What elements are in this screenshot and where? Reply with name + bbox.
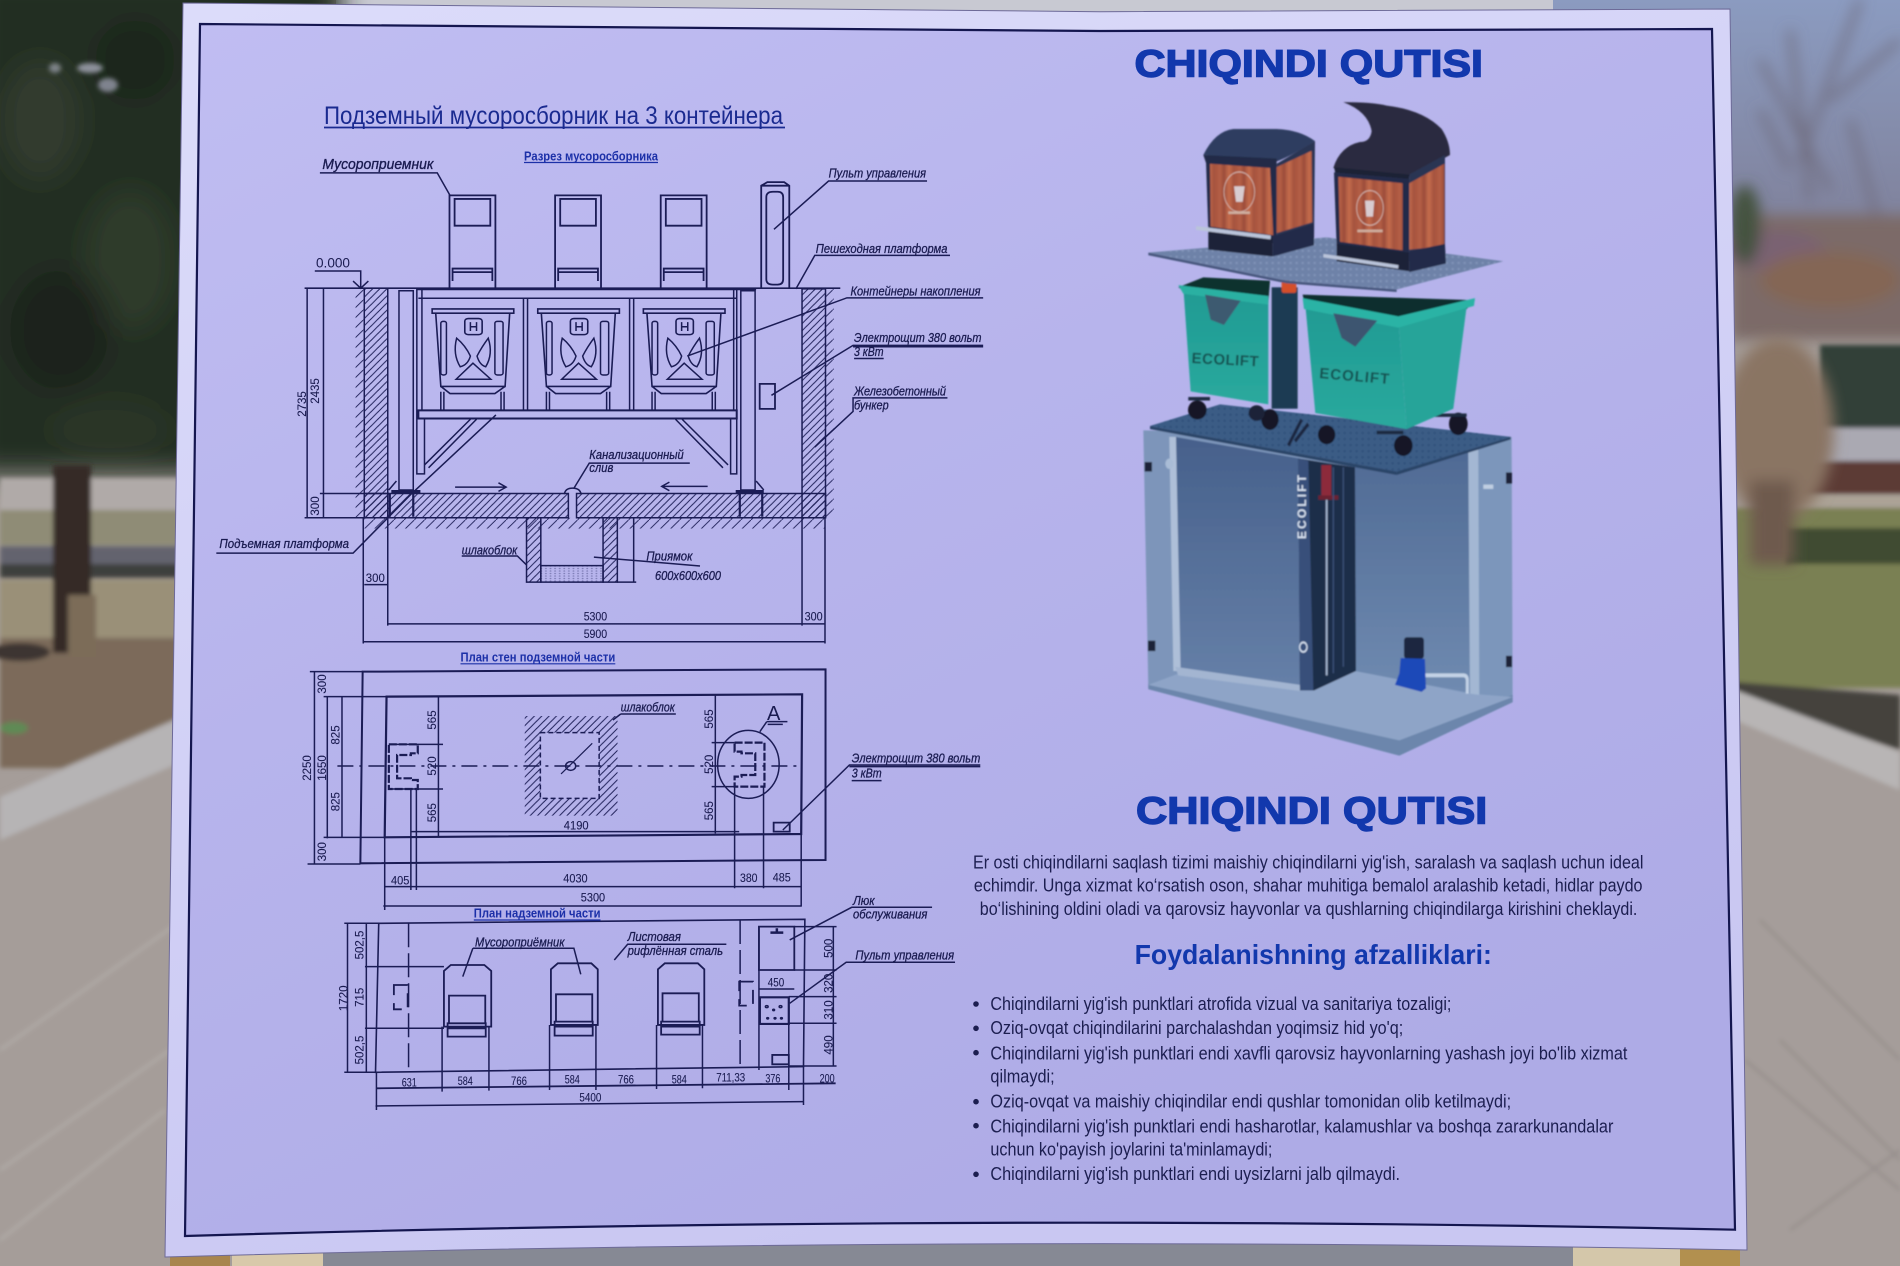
underground plan labels: 2250 xyxy=(302,755,314,781)
cross-section labels and dimensions: 300 xyxy=(805,611,823,623)
teal containers xyxy=(1178,277,1270,302)
cross-section labels and dimensions: 300 xyxy=(310,496,322,516)
plan of above-ground part: labels: обслуживания xyxy=(853,906,927,921)
benefits list: uchun ko'payish joylarini ta'minlamaydi; xyxy=(990,1140,1272,1160)
flow arrows and drain xyxy=(455,482,708,491)
dimension lines xyxy=(305,288,825,644)
cross-section labels and dimensions: 3 кВт xyxy=(854,344,884,359)
cross-section labels and dimensions: Контейнеры накопления xyxy=(850,283,981,298)
plan of above-ground part: labels: 200 xyxy=(820,1074,835,1086)
underground plan labels: 565 xyxy=(704,709,716,729)
cross-section labels and dimensions: 5300 xyxy=(584,611,607,623)
underground plan labels: 485 xyxy=(773,873,791,885)
benefits heading: Foydalanishning afzalliklari: xyxy=(1135,939,1492,970)
product lettering xyxy=(1191,350,1390,539)
right kiosk xyxy=(1333,102,1450,177)
plan of above-ground part: labels: 376 xyxy=(765,1074,780,1086)
underground plan labels: 405 xyxy=(391,875,409,887)
underground plan labels: 4190 xyxy=(564,820,589,832)
underground plan labels: 300 xyxy=(317,842,329,861)
wheels xyxy=(1188,400,1207,420)
plan of above-ground part: labels: 5400 xyxy=(579,1093,601,1105)
above-ground plan xyxy=(376,919,805,1072)
underground plan labels: 825 xyxy=(331,725,343,745)
lower deck xyxy=(1150,404,1511,472)
underground plan labels xyxy=(302,650,980,905)
cross-section labels and dimensions: Пешеходная платформа xyxy=(816,241,947,256)
left kiosk xyxy=(1203,129,1315,162)
plan of above-ground part: labels: 584 xyxy=(458,1076,473,1088)
plan of above-ground part: labels: 490 xyxy=(823,1035,835,1055)
plan of above-ground part: labels: 584 xyxy=(565,1075,580,1087)
cross-section labels and dimensions: Разрез мусоросборника xyxy=(524,148,659,163)
plan of above-ground part: labels: 766 xyxy=(511,1076,527,1088)
benefits list: Oziq-ovqat va maishiy chiqindilar endi qushlar tomonidan olib ketilmaydi; xyxy=(990,1091,1511,1111)
plan of above-ground part: labels: 500 xyxy=(823,939,835,958)
cross-section geometry xyxy=(216,173,983,644)
plan of above-ground part: labels: 711,33 xyxy=(716,1073,745,1085)
inner frame xyxy=(185,24,1735,1236)
underground plan labels: Электрощит 380 вольт xyxy=(852,750,980,765)
cross-section labels and dimensions: Электрощит 380 вольт xyxy=(854,330,982,345)
container 2 xyxy=(538,309,619,410)
control console xyxy=(761,182,789,289)
underground plan labels: План стен подземной части xyxy=(460,650,615,665)
illustration: underground bin unit xyxy=(1143,102,1513,756)
cross-section labels and dimensions: шлакоблок xyxy=(462,542,518,557)
cross-section labels and dimensions: 2435 xyxy=(310,378,322,404)
upper bins xyxy=(449,195,495,288)
benefits list: Chiqindilarni yig'ish punktlari atrofida vizual va sanitariya tozaligi; xyxy=(990,994,1451,1014)
top plate xyxy=(1148,237,1503,289)
underground plan labels: 1650 xyxy=(317,755,329,781)
intro paragraph: bo‘lishining oldini oladi va qarovsiz hayvonlar va qushlarning chiqindilarga kirishini cheklaydi. xyxy=(980,899,1637,919)
cross-section labels and dimensions: Мусороприемник xyxy=(322,156,434,173)
leader lines xyxy=(320,173,983,356)
benefits list: Chiqindilarni yig'ish punktlari endi hasharotlar, kalamushlar va boshqa zararkunandalar xyxy=(990,1117,1613,1137)
plan of above-ground part: labels: Люк xyxy=(852,893,875,908)
container 1 xyxy=(432,309,514,410)
cross-section labels and dimensions: 300 xyxy=(366,573,385,585)
heading: second: CHIQINDI QUTISI xyxy=(1136,790,1487,832)
underground plan labels: 3 кВт xyxy=(852,765,882,780)
plan of above-ground part: labels: 715 xyxy=(355,988,367,1007)
plan of above-ground part: labels: 502,5 xyxy=(355,1036,367,1064)
plan of above-ground part: labels: 502,5 xyxy=(355,931,367,959)
benefits list: Chiqindilarni yig'ish punktlari endi uysizlarni jalb qilmaydi. xyxy=(990,1164,1400,1184)
cross-section labels and dimensions: Подъемная платформа xyxy=(219,536,349,551)
cross-section labels and dimensions: Приямок xyxy=(646,549,693,564)
plan of above-ground part: labels: 450 xyxy=(768,978,784,990)
lift column xyxy=(1298,459,1356,691)
concrete pit xyxy=(1143,102,1513,756)
cross-section labels and dimensions: Канализационный xyxy=(589,447,684,462)
plan of above-ground part: labels: 320 xyxy=(823,974,835,993)
intro paragraph: Er osti chiqindilarni saqlash tizimi maishiy chiqindilarni yig'ish, saralash va saqlash uchun ideal xyxy=(973,852,1643,872)
underground plan labels: 5300 xyxy=(581,893,605,905)
underground plan labels: 380 xyxy=(740,873,758,885)
plan of above-ground part: labels: План надземной части xyxy=(474,906,600,921)
plan of above-ground part: labels: 766 xyxy=(618,1075,634,1087)
underground plan labels: 520 xyxy=(704,755,716,774)
cross-section labels and dimensions: 2735 xyxy=(297,391,309,417)
intro paragraph: echimdir. Unga xizmat ko‘rsatish oson, shahar muhitiga bemalol aralashib ketadi, hidlar paydo xyxy=(974,876,1642,896)
plan of above-ground part: labels: 1720 xyxy=(338,986,350,1011)
underground plan labels: 300 xyxy=(317,674,329,694)
product lettering: ECOLIFT xyxy=(1319,365,1390,388)
plan of above-ground part: labels xyxy=(338,893,954,1105)
underground plan labels: 4030 xyxy=(563,874,588,886)
underground plan labels: 565 xyxy=(704,801,716,820)
underground plan labels: 825 xyxy=(331,792,343,811)
centre column and valve xyxy=(1272,287,1298,409)
underground plan labels: 520 xyxy=(427,756,439,776)
cross-section labels and dimensions: бункер xyxy=(854,398,889,413)
plan of above-ground part: labels: 310 xyxy=(823,1000,835,1020)
section drawing: cross-section of the collector xyxy=(216,148,983,644)
cross-section labels and dimensions: Пульт управления xyxy=(829,166,926,180)
plan of above-ground part: labels: Мусороприёмник xyxy=(475,935,565,950)
underground plan labels: 565 xyxy=(427,803,439,822)
product lettering: ECOLIFT xyxy=(1191,350,1259,371)
cross-section labels and dimensions: слив xyxy=(589,460,613,475)
product lettering: ECOLIFT xyxy=(1295,474,1309,539)
benefits list: Oziq-ovqat chiqindilarini parchalashdan yoqimsiz hid yo'q; xyxy=(990,1018,1403,1038)
benefits list: Chiqindilarni yig'ish punktlari endi xavfli qarovsiz hayvonlarning yashash joyi bo'lib xizmat xyxy=(990,1043,1627,1063)
underground plan labels: А xyxy=(767,703,781,725)
cross-section labels and dimensions: 0.000 xyxy=(316,254,350,270)
heading: top: CHIQINDI QUTISI xyxy=(1134,44,1483,86)
underground plan geometry xyxy=(308,669,980,1110)
sump pump xyxy=(1425,675,1467,694)
underground plan labels: 565 xyxy=(427,710,439,730)
benefits list xyxy=(973,994,1627,1184)
plan of above-ground part: labels: 584 xyxy=(672,1074,687,1086)
plan of underground walls xyxy=(302,650,980,1110)
cross-section labels and dimensions: Железобетонный xyxy=(853,383,946,398)
plan of above-ground part: labels: 631 xyxy=(402,1078,417,1090)
container 3 xyxy=(643,309,725,410)
cross-section labels and dimensions: 600х600х600 xyxy=(655,568,722,583)
plan of above-ground part: labels: Пульт управления xyxy=(855,947,954,962)
cross-section labels and dimensions xyxy=(219,148,982,641)
intro paragraph xyxy=(973,852,1643,919)
plan of above-ground part: labels: Листовая xyxy=(627,929,681,944)
benefits list: qilmaydi; xyxy=(990,1067,1055,1087)
cross-section labels and dimensions: 5900 xyxy=(584,629,607,641)
underground plan labels: шлакоблок xyxy=(621,700,675,715)
plan of above-ground part: labels: рифлённая сталь xyxy=(627,943,723,958)
main drawing title: Подземный мусоросборник на 3 контейнера xyxy=(324,102,783,130)
